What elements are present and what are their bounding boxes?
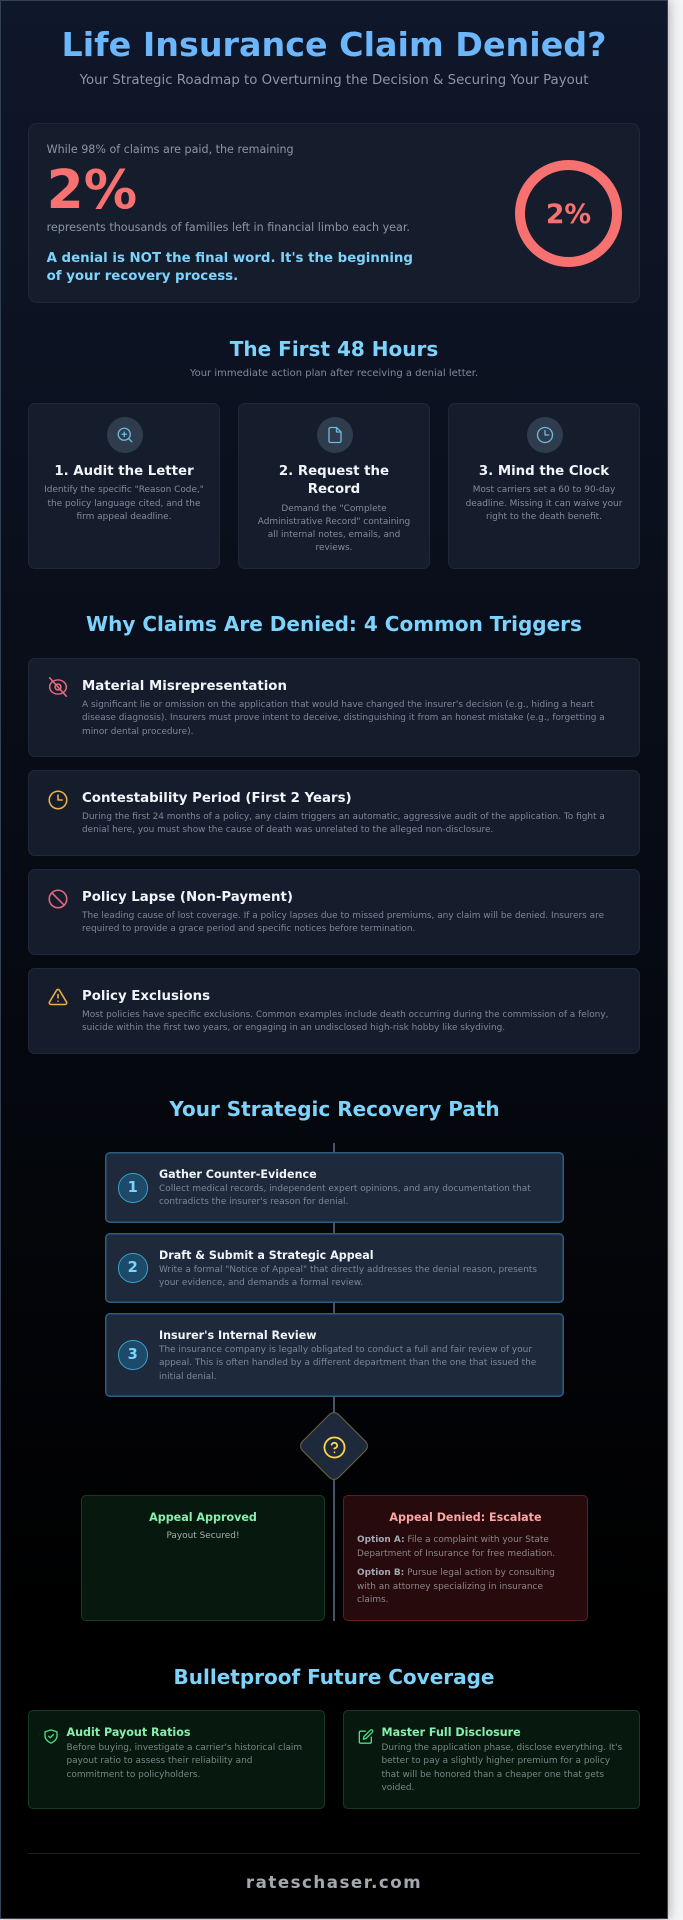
section subheading: Your immediate action plan after receiving a denial letter.: [190, 368, 478, 379]
option B: claims.: [357, 1595, 389, 1605]
step text: [159, 1184, 531, 1207]
section: future coverage: [28, 1665, 640, 1809]
title: Life Insurance Claim Denied?: [61, 25, 607, 64]
step number: [118, 1253, 148, 1282]
outcome title: Appeal Approved: [149, 1511, 257, 1524]
option A: Option A: File a complaint with your State: [357, 1535, 549, 1545]
card text: Identify the specific "Reason Code,": [44, 485, 204, 495]
card text: Most carriers set a 60 to 90-day: [473, 485, 615, 495]
card text: [44, 485, 204, 522]
icon: clock: [526, 417, 562, 453]
section: denial triggers: [28, 612, 640, 1054]
tip text: During the application phase, disclose everything. It's: [382, 1743, 622, 1753]
step text: [159, 1265, 537, 1288]
tip text: [66, 1743, 302, 1780]
trigger text: required to provide a grace period and specific notices before termination.: [82, 924, 415, 934]
trigger text: denial here, you must show the cause of death was unrelated to the alleged non-disclosure.: [82, 825, 493, 835]
step 2: [105, 1233, 564, 1303]
trigger text: disease diagnosis). Insurers must prove intent to deceive, distinguishing it from an honest mistake (e.g., forgetting a: [82, 713, 605, 723]
tip: master full disclosure: [343, 1710, 640, 1809]
trigger title: Policy Exclusions: [82, 989, 210, 1004]
flow spine line: [333, 1143, 335, 1621]
card: request the record: [238, 403, 430, 569]
step title: Insurer's Internal Review: [159, 1329, 317, 1342]
footer: [28, 1853, 640, 1903]
card text: reviews.: [316, 543, 352, 553]
card title: 2. Request the: [279, 464, 389, 479]
trigger text: [82, 911, 604, 934]
trigger text: The leading cause of lost coverage. If a policy lapses due to missed premiums, any claim will be denied. Insurers are: [82, 911, 604, 921]
brand name: rateschaser.com: [246, 1873, 422, 1892]
hero callout: A denial is NOT the final word. It's the beginning: [47, 251, 413, 266]
hero callout: of your recovery process.: [47, 269, 238, 284]
section heading: Bulletproof Future Coverage: [174, 1665, 494, 1689]
card: mind the clock: [448, 403, 640, 569]
icon: warning triangle: [48, 988, 68, 1006]
card text: Demand the "Complete: [281, 504, 387, 514]
card text: deadline. Missing it can waive your: [466, 499, 622, 509]
section heading: Your Strategic Recovery Path: [169, 1097, 500, 1121]
card text: all internal notes, emails, and: [268, 530, 400, 540]
big 2% figure: 2%: [47, 158, 137, 220]
step number: [118, 1340, 148, 1370]
tip text: [382, 1743, 622, 1793]
trigger title: Policy Lapse (Non-Payment): [82, 890, 293, 905]
subtitle: Your Strategic Roadmap to Overturning the Decision & Securing Your Payout: [80, 73, 588, 88]
tip title: Master Full Disclosure: [382, 1726, 521, 1739]
hero lead-in text: While 98% of claims are paid, the remaining: [47, 143, 294, 156]
trigger: material misrepresentation: [28, 658, 640, 757]
hero callout: [46, 251, 413, 284]
icon: question mark: [324, 1436, 346, 1458]
trigger: contestability period: [28, 770, 640, 856]
option B: [357, 1568, 555, 1605]
step text: Collect medical records, independent expert opinions, and any documentation that: [159, 1184, 531, 1194]
step number: [118, 1173, 148, 1202]
tip text: better to pay a slightly higher premium for a policy: [382, 1756, 610, 1766]
tip: audit payout ratios: [28, 1710, 325, 1809]
tip title: Audit Payout Ratios: [66, 1726, 190, 1739]
tip text: voided.: [382, 1783, 414, 1793]
step title: Gather Counter-Evidence: [159, 1168, 317, 1181]
card text: the policy language cited, and the: [48, 499, 200, 509]
step text: your evidence, and demands a formal review.: [159, 1278, 363, 1288]
step text: Write a formal "Notice of Appeal" that directly addresses the denial reason, presents: [159, 1265, 537, 1275]
trigger title: Material Misrepresentation: [82, 679, 287, 694]
step text: contradicts the insurer's reason for denial.: [159, 1197, 348, 1207]
outcome title: Appeal Denied: Escalate: [389, 1511, 542, 1524]
icon: prohibited: [48, 890, 68, 908]
outcome text: Payout Secured!: [166, 1531, 240, 1541]
step number: 3: [128, 1346, 138, 1363]
tip text: Before buying, investigate a carrier's historical claim: [66, 1743, 302, 1753]
card: audit the letter: [28, 403, 220, 569]
card title: [279, 464, 389, 497]
section heading: Why Claims Are Denied: 4 Common Triggers: [86, 612, 582, 636]
step 3: [105, 1313, 564, 1397]
trigger: policy exclusions: [28, 968, 640, 1054]
trigger text: minor dental procedure).: [82, 727, 193, 737]
step 1: [105, 1152, 564, 1223]
trigger text: Most policies have specific exclusions. Common examples include death occurring during the commission of a felony,: [82, 1010, 608, 1020]
trigger text: [82, 700, 605, 737]
step text: initial denial.: [159, 1372, 216, 1382]
card title: Record: [308, 482, 360, 497]
option B: with an attorney specializing in insurance: [357, 1582, 543, 1592]
card text: Administrative Record" containing: [258, 517, 410, 527]
icon: shield check: [44, 1729, 58, 1744]
step title: Draft & Submit a Strategic Appeal: [159, 1249, 374, 1262]
card title: 1. Audit the Letter: [54, 464, 194, 479]
trigger text: suicide within the first two years, or engaging in an undisclosed high-risk hobby like skydiving.: [82, 1023, 505, 1033]
trigger: policy lapse: [28, 869, 640, 955]
panel: 2% statistic hero: [28, 123, 640, 303]
step number: 2: [128, 1259, 138, 1276]
card text: right to the death benefit.: [486, 512, 602, 522]
card text: [466, 485, 622, 522]
card text: [258, 504, 410, 553]
icon: magnifier: [106, 417, 142, 453]
tip text: commitment to policyholders.: [66, 1770, 200, 1780]
icon: pencil on square: [358, 1729, 374, 1744]
icon: crossed eye: [48, 677, 68, 697]
icon: document: [316, 417, 352, 453]
ring chart: 2%: 2%: [546, 199, 591, 230]
icon: clock: [48, 790, 68, 810]
hero description: represents thousands of families left in financial limbo each year.: [47, 221, 410, 234]
option B: Option B: Pursue legal action by consulting: [357, 1568, 555, 1578]
trigger text: [82, 812, 605, 835]
step text: [159, 1345, 536, 1382]
trigger text: During the first 24 months of a policy, any claim triggers an automatic, aggressive audit of the application. To fight a: [82, 812, 605, 822]
option A: Department of Insurance for free mediation.: [357, 1549, 555, 1559]
outcome: appeal denied: [343, 1495, 588, 1621]
step number: 1: [128, 1179, 138, 1196]
trigger title: Contestability Period (First 2 Years): [82, 791, 352, 806]
option A: [357, 1535, 555, 1559]
section: recovery path flowchart: [81, 1097, 588, 1621]
trigger text: [82, 1010, 608, 1033]
step text: The insurance company is legally obligated to conduct a full and fair review of your: [159, 1345, 532, 1355]
section heading: The First 48 Hours: [230, 337, 438, 361]
decision diamond: [297, 1409, 371, 1483]
tip text: payout ratio to assess their reliability and: [66, 1756, 252, 1766]
outcome: appeal approved: [81, 1495, 325, 1621]
card title: 3. Mind the Clock: [479, 464, 609, 479]
card text: firm appeal deadline.: [77, 512, 171, 522]
step text: appeal. This is often handled by a different department than the one that issued the: [159, 1358, 536, 1368]
ring chart: 2%: [515, 160, 622, 267]
trigger text: A significant lie or omission on the application that would have changed the insurer's decision (e.g., hiding a heart: [82, 700, 594, 710]
section: the first 48 hours: [28, 337, 640, 569]
tip text: that will be honored than a cheaper one that gets: [382, 1770, 604, 1780]
